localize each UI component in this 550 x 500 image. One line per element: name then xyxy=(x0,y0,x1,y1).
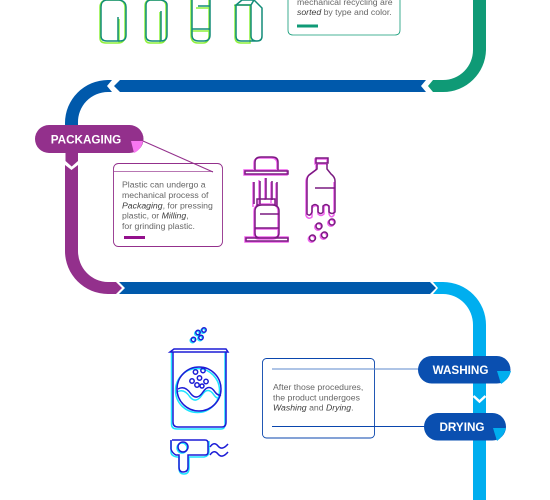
heading: washing pill: WASHING xyxy=(433,364,488,377)
text: washing and drying description: and Drying. xyxy=(309,403,354,413)
panel: sorting text box xyxy=(288,0,400,35)
accent bar xyxy=(124,236,145,239)
icon: milled bottle xyxy=(306,158,335,242)
arrow notch between washing and drying xyxy=(474,396,486,402)
connector: washing line xyxy=(272,368,420,370)
path: cyan segment xyxy=(433,282,486,500)
path: purple segment xyxy=(65,165,122,294)
text: washing and drying description: After those procedures, xyxy=(273,382,363,392)
icon: washing machine xyxy=(170,328,228,429)
text: sorting description second line: sorted by type and color. xyxy=(297,7,392,17)
text: washing and drying description: Washing xyxy=(273,403,307,413)
path: green segment top right xyxy=(428,0,486,92)
panel: washing and drying text box xyxy=(262,358,374,438)
icon: press machine xyxy=(244,157,288,242)
text: packaging description: Packaging xyxy=(122,200,163,210)
heading: washing pill xyxy=(418,356,511,384)
text: washing and drying description: the product undergoes xyxy=(273,392,361,402)
text: packaging description: , for pressing xyxy=(163,200,213,210)
icon: plastic bottle 3 xyxy=(191,0,210,43)
text: packaging description: mechanical process of xyxy=(122,190,209,200)
heading: packaging pill xyxy=(35,125,213,172)
text: packaging description: Plastic can undergo a xyxy=(122,180,206,190)
icon: plastic bottle 2 xyxy=(145,0,167,43)
icon: plastic bottle 1 xyxy=(100,0,126,43)
icon: carton xyxy=(235,0,262,43)
text: packaging description: for grinding plastic. xyxy=(122,221,195,231)
heading: packaging pill: PACKAGING xyxy=(51,134,121,146)
text: packaging description: plastic, or xyxy=(122,211,162,221)
accent bar xyxy=(297,24,318,28)
panel: packaging text box xyxy=(114,164,222,246)
heading: drying pill xyxy=(424,413,506,441)
path: blue curve to packaging xyxy=(65,80,112,130)
connector: drying line xyxy=(272,426,426,428)
path: blue segment upper xyxy=(114,80,426,92)
icon: hair dryer xyxy=(171,440,228,474)
text: packaging description: Milling, xyxy=(162,211,189,221)
path: cyan stripe between pills xyxy=(473,380,486,416)
path: blue segment lower xyxy=(119,282,436,294)
heading: drying pill: DRYING xyxy=(439,421,485,434)
